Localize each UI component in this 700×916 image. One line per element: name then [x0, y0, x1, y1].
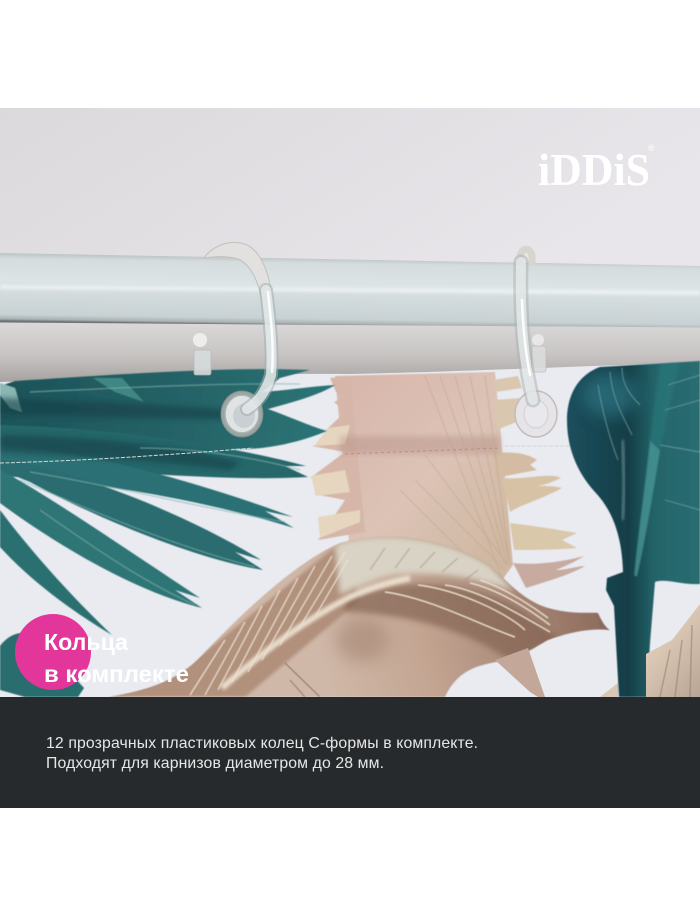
dark caption panel [0, 697, 700, 808]
frond C [18, 476, 264, 571]
curtain rail [0, 253, 700, 328]
pale upper rim [335, 537, 515, 595]
light streaks [20, 384, 300, 605]
ring upper arc [204, 242, 271, 300]
badge heading [44, 629, 189, 687]
stitch seam on teal [0, 448, 253, 463]
fold band [340, 436, 500, 454]
frond B [0, 445, 294, 528]
small hook right [532, 334, 546, 372]
leaf tip curl [598, 613, 610, 630]
caption text [46, 735, 478, 772]
stitch seam right [505, 446, 700, 447]
bottom-left leaf [0, 633, 84, 697]
cream ridge [222, 578, 410, 688]
dark streaks [0, 398, 260, 470]
curtain fabric [0, 361, 700, 697]
caption text: Подходят для карнизов диаметром до 28 мм. [46, 755, 384, 772]
fan body [335, 372, 513, 590]
small hook left [193, 333, 211, 375]
pink palm leaf [310, 372, 585, 590]
grommet left [221, 391, 263, 437]
shaded curtain heading under rail [0, 320, 700, 382]
cream veins [385, 580, 550, 637]
rim feathers [370, 548, 478, 580]
rail highlight [0, 285, 700, 295]
pale midrib streak [622, 440, 624, 520]
pink badge circle [15, 614, 91, 690]
dark band under rim [345, 584, 560, 660]
beige leaf ribs [660, 625, 692, 697]
product infographic [0, 108, 700, 808]
logo: IDDIS: iDDiS [538, 144, 650, 195]
brown wedge [495, 648, 545, 697]
right frond tips [493, 376, 522, 430]
beige leaf corner [646, 604, 700, 697]
light frond tail [0, 383, 22, 412]
registered mark: ® [648, 143, 655, 153]
leaf body [108, 536, 610, 697]
brown feathered arm [108, 543, 360, 697]
stitch seam on pink [345, 448, 500, 454]
upper mass [0, 369, 335, 452]
wall background [0, 108, 700, 278]
frond A [0, 425, 308, 478]
teal palm leaf [0, 369, 335, 697]
lower beige leaf [600, 683, 618, 697]
teal midrib [633, 440, 660, 592]
big brown leaf [108, 536, 610, 697]
badge heading: Кольца [44, 629, 128, 655]
feather lines [190, 552, 348, 695]
top highlight [582, 373, 638, 417]
grommet right [515, 391, 557, 437]
leaf blade and stem [567, 361, 700, 697]
fan ribs [400, 376, 509, 564]
frond D [0, 470, 202, 608]
badge heading: в комплекте [44, 661, 189, 687]
frond E [0, 510, 112, 635]
soft shadow [336, 618, 388, 662]
C-ring right [520, 249, 533, 400]
C-ring left [204, 242, 273, 409]
left frond tips [310, 376, 365, 540]
leaf veins [598, 368, 700, 510]
big teal leaf with stem [567, 361, 700, 697]
photo: curtain on rail [0, 108, 700, 697]
dark veins [285, 663, 320, 697]
ring shank [247, 290, 273, 409]
caption text: 12 прозрачных пластиковых колец С-формы в комплекте. [46, 735, 478, 752]
